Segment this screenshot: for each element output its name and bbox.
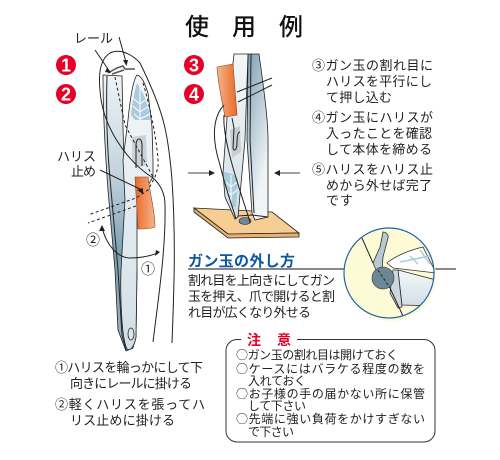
caution list: ○ガン玉の割れ目は開けておく: [236, 346, 398, 363]
instructions: steps 1 and 2: [55, 357, 205, 429]
instructions: steps 3 to 5: [312, 55, 433, 209]
illustration: left tool with line loop: ①: [141, 259, 155, 279]
instructions: steps 3 to 5: です: [326, 190, 353, 209]
feather pattern: [224, 172, 238, 207]
caution heading: 注: [247, 330, 261, 350]
hook: [232, 118, 240, 150]
caution list: ○ケースにはバラケる程度の数を: [236, 360, 425, 377]
feather pattern: [131, 83, 150, 120]
callout leader line: [188, 268, 456, 270]
tool back blade: [103, 75, 137, 351]
text: removal instructions: れ目が広くなり外せる: [188, 302, 311, 321]
caution list: ○お子様の手の届かない所に保管: [236, 385, 425, 402]
tip ball: [238, 215, 268, 217]
arrow: motion 1 and 2: [99, 225, 160, 258]
instructions: steps 1 and 2: ②軽くハリスを張ってハ: [55, 394, 205, 413]
step badges 3 and 4: 4: [189, 84, 199, 104]
title: 使用例: [185, 7, 303, 42]
fishing line loop: [99, 51, 174, 343]
instructions: steps 3 to 5: ③ガン玉の割れ目に: [312, 55, 433, 74]
caution list: [236, 346, 425, 440]
caution list: 入れておく: [248, 372, 306, 389]
rail top: [108, 66, 135, 74]
label: line stopper: [57, 146, 96, 180]
text: removal instructions: 割れ目を上向きにしてガン: [188, 270, 335, 289]
front blade: [223, 54, 248, 219]
caution heading: [247, 330, 291, 350]
instructions: steps 3 to 5: て押し込む: [326, 87, 392, 106]
label: line stopper: 止め: [71, 161, 96, 180]
step badges 1 and 2: 2: [61, 84, 71, 104]
instructions: steps 3 to 5: めから外せば完了: [326, 175, 432, 194]
hook: [132, 135, 147, 168]
step badges 3 and 4: 3: [189, 56, 199, 76]
arrow: stopper leader: [100, 170, 143, 194]
caution heading: 意: [277, 330, 291, 350]
caution list: で下さい: [248, 423, 294, 440]
instructions: steps 1 and 2: リス止めに掛ける: [70, 410, 175, 429]
arrow: press left: [188, 170, 215, 176]
text: removal instructions: 玉を押え、爪で開けると割: [188, 286, 335, 305]
heading: removing the split shot: ガン玉の外し方: [188, 250, 295, 271]
tool front blade: [121, 75, 153, 350]
label: line stopper: ハリス: [57, 146, 96, 165]
instructions: steps 3 to 5: ④ガン玉にハリスが: [312, 107, 433, 126]
arrow: rail leader: [95, 37, 128, 73]
illustration: right tool on board: [188, 54, 300, 238]
back blade: [247, 54, 268, 220]
text: removal instructions: [188, 270, 335, 321]
step badges 3 and 4: [184, 55, 204, 104]
instructions: steps 3 to 5: 入ったことを確認: [326, 123, 432, 142]
instructions: steps 1 and 2: ①ハリスを輪っかにして下: [55, 357, 203, 376]
labels: circled numbers: ②: [86, 230, 100, 250]
detail circle: split shot close-up: [344, 228, 436, 321]
orange split shot: [217, 64, 237, 117]
orange split shot: [135, 177, 155, 229]
arrow: press right: [274, 170, 300, 176]
step badges 1 and 2: 1: [61, 56, 71, 76]
caution list: ○先端に強い負荷をかけすぎない: [236, 410, 425, 427]
fishing line: [214, 78, 272, 222]
panel: caution box: [226, 330, 435, 442]
label: rail: レール: [74, 28, 113, 47]
wood board: [194, 208, 299, 234]
instructions: steps 1 and 2: 向きにレールに掛ける: [70, 373, 192, 392]
instructions: steps 3 to 5: ⑤ハリスをハリス止: [312, 159, 433, 178]
instructions: steps 3 to 5: して本体を締める: [326, 139, 432, 158]
illustration: left tool with line loop: [86, 37, 174, 351]
instructions: steps 3 to 5: ハリスを平行にし: [326, 71, 432, 90]
dashed line path: [88, 77, 158, 223]
caution list: して下さい: [248, 397, 306, 414]
step badges 1 and 2: [56, 55, 76, 104]
